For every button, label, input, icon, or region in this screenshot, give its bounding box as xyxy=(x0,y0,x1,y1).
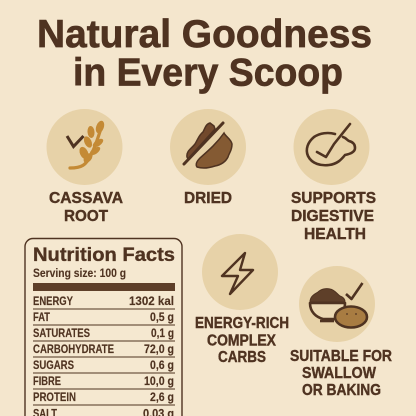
nutrition rows: CARBOHYDRATE xyxy=(33,344,114,356)
nutrition rows xyxy=(33,296,175,416)
nutrition rows: 10,0 g xyxy=(144,376,174,388)
label: HEALTH xyxy=(304,226,366,243)
label xyxy=(195,315,289,366)
panel: nutrition facts xyxy=(25,238,182,416)
icon: dried root slices xyxy=(184,123,232,168)
panel: energy-rich complex carbs xyxy=(195,234,289,366)
thick bar xyxy=(33,283,175,291)
nutrition rows: 72,0 g xyxy=(144,344,174,356)
icon: lightning bolt xyxy=(222,253,253,294)
label xyxy=(49,190,123,225)
panel: dried xyxy=(170,109,246,207)
nutrition rows: 0,6 g xyxy=(150,360,174,372)
label: DRIED xyxy=(184,190,232,207)
label: DIGESTIVE xyxy=(291,208,374,225)
label: CARBS xyxy=(218,349,266,366)
nutrition rows: 0,5 g xyxy=(150,312,174,324)
title: Natural Goodness xyxy=(37,13,372,56)
nutrition rows: SUGARS xyxy=(33,360,74,372)
nutrition rows: 0,1 g xyxy=(151,328,174,340)
nutrition rows: 1302 kal xyxy=(129,296,174,308)
icon: check and grain xyxy=(67,120,106,168)
title: in Every Scoop xyxy=(73,52,343,94)
icon: stomach with check xyxy=(307,124,355,165)
nutrition rows: PROTEIN xyxy=(33,392,76,404)
label: OR BAKING xyxy=(302,382,381,399)
nutrition rows: 2,6 g xyxy=(150,392,174,404)
panel: swallow or baking xyxy=(290,266,392,399)
label xyxy=(291,190,376,243)
label: SUITABLE FOR xyxy=(290,348,392,365)
nutrition rows: FIBRE xyxy=(33,376,61,388)
label: ENERGY-RICH xyxy=(195,315,289,332)
nutrition rows: ENERGY xyxy=(33,296,73,308)
label: CASSAVA xyxy=(49,190,123,207)
label: COMPLEX xyxy=(207,332,277,350)
label: SWALLOW xyxy=(302,365,376,382)
nutrition rows: SATURATES xyxy=(33,328,90,340)
panel: digestive health xyxy=(291,109,376,243)
panel: cassava root xyxy=(46,109,123,225)
label xyxy=(290,348,392,399)
nutrition rows: FAT xyxy=(33,312,50,324)
label: ROOT xyxy=(64,208,109,225)
icon: flour bowl and cassava xyxy=(310,283,367,328)
serving size: Serving size: 100 g xyxy=(33,268,126,280)
label: SUPPORTS xyxy=(291,190,376,207)
title xyxy=(37,13,372,94)
nutrition heading: Nutrition Facts xyxy=(33,244,175,266)
